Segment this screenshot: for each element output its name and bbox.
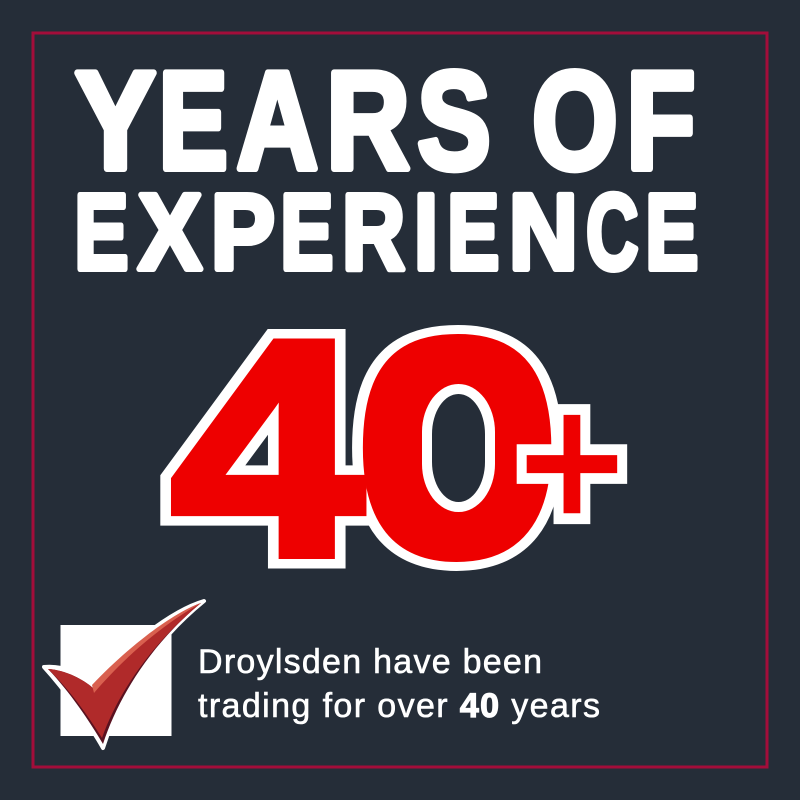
title line 2: E (447, 172, 499, 292)
outline of plus: + (520, 355, 624, 570)
white square (60, 625, 172, 736)
title line 2: I (414, 171, 438, 292)
checkmark shadow (48, 603, 201, 744)
title line 1: Y (75, 42, 156, 198)
title line 1: F (626, 42, 695, 198)
title line 1: O (532, 42, 618, 198)
title line 1: E (159, 43, 228, 198)
checkmark red body (48, 603, 201, 738)
red plus: + (520, 355, 624, 570)
description text (198, 643, 600, 725)
title line 2 (74, 171, 698, 293)
title line 2: X (138, 171, 202, 292)
title line 1 (75, 42, 695, 199)
red 4: 4 (171, 277, 365, 619)
icon: check box (44, 601, 204, 748)
red 0: 0 (356, 278, 559, 618)
title line 1: S (417, 42, 491, 198)
outline of 4: 4 (171, 277, 365, 619)
title line 2: N (509, 172, 578, 292)
title line 1: R (326, 44, 410, 199)
checkmark highlight (92, 603, 201, 693)
description line 2: trading for over 40 years (198, 687, 600, 725)
title line 1: A (237, 42, 318, 198)
big number 40+ (171, 277, 624, 619)
description line 1: Droylsden have been (198, 643, 542, 681)
counter of 0: white ring (422, 384, 495, 512)
title line 2: R (342, 171, 405, 292)
title line 2: E (74, 172, 128, 293)
title (74, 42, 698, 293)
outline of 0: 0 (356, 278, 559, 618)
title line 2: C (586, 173, 638, 292)
counter of 0: red backing (410, 370, 507, 526)
title line 2: E (280, 172, 333, 293)
counter of 0: dark centre (432, 394, 485, 502)
title line 2: P (211, 171, 275, 292)
title line 2: E (645, 172, 698, 293)
checkmark outline (44, 601, 204, 748)
